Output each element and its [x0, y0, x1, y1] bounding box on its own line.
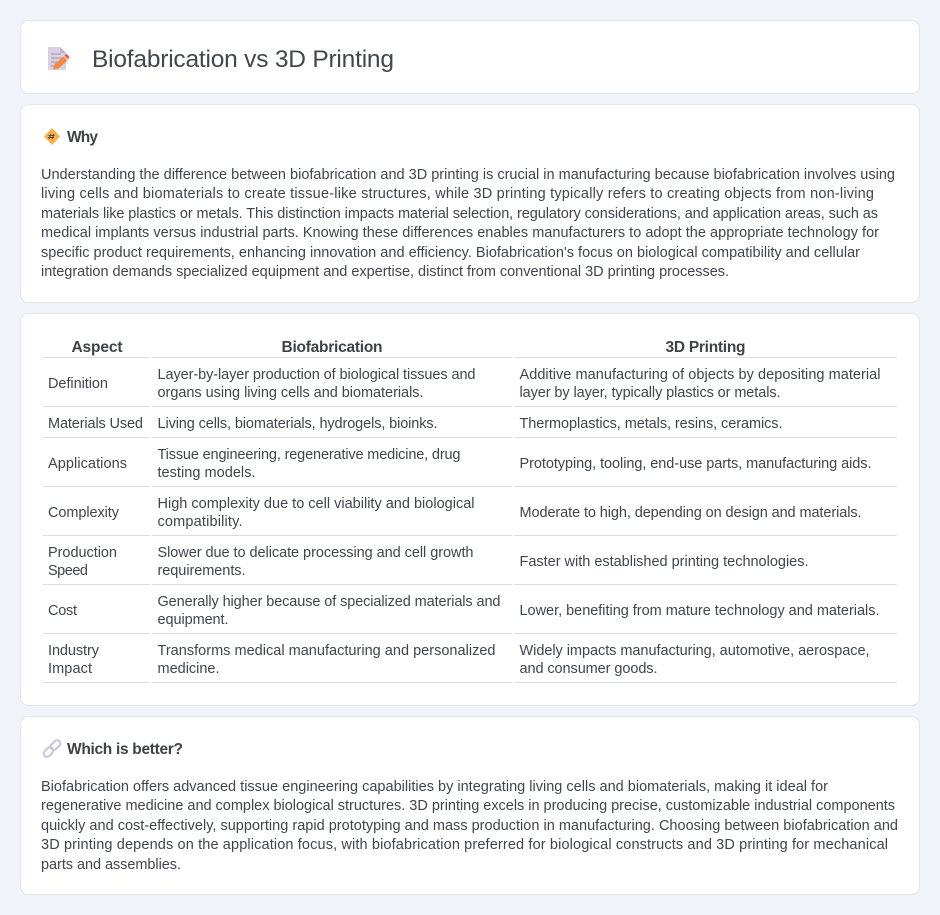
panel: header	[20, 20, 920, 94]
row: complexity: Complexity	[48, 505, 120, 521]
row: industry impact: Impact	[48, 661, 92, 677]
row: definition: layer by layer, typically plastics or metals.	[520, 385, 780, 401]
text block: why explanation	[41, 167, 895, 280]
row: definition: Definition	[48, 376, 108, 392]
text block: which is better explanation: Biofabrication offers advanced tissue engineering capabilities by integrating living cells and biomaterials, making it ideal for	[41, 779, 828, 795]
heading: why: Why	[67, 129, 98, 146]
text block: which is better explanation	[41, 779, 898, 873]
row: production speed: Production	[48, 545, 117, 561]
row: applications: Applications	[48, 456, 127, 472]
row: cost: Generally higher because of specialized materials and	[158, 594, 500, 610]
text block: why explanation: living cells and biomaterials to create tissue-like structures, while 3D printing typically refers to creating objects from non-living	[41, 186, 874, 202]
text block: which is better explanation: regenerative medicine and complex biological structures. 3D printing excels in producing precise, customizable industrial components	[41, 798, 895, 814]
icon: memo with pencil	[48, 47, 70, 70]
heading: which is better: Which is better?	[67, 741, 183, 758]
panel: comparison table	[20, 314, 920, 706]
row: complexity: High complexity due to cell viability and biological	[158, 496, 474, 512]
row: industry impact: medicine.	[158, 661, 220, 677]
row: production speed: Slower due to delicate processing and cell growth	[158, 545, 474, 561]
icon: link	[42, 739, 62, 758]
row: definition: Layer-by-layer production of biological tissues and	[158, 367, 476, 383]
row: definition: Additive manufacturing of objects by depositing material	[520, 367, 880, 383]
text block: why explanation: integration demands specialized equipment and expertise, distinct from conventional 3D printing processes.	[41, 264, 729, 280]
row: industry impact: and consumer goods.	[520, 661, 658, 677]
row: complexity: compatibility.	[158, 514, 242, 530]
row: definition: organs using living cells and biomaterials.	[158, 385, 424, 401]
row: cost: equipment.	[158, 612, 228, 628]
row: industry impact	[48, 643, 870, 677]
row: applications	[48, 447, 872, 481]
row: definition	[48, 367, 880, 401]
row: cost: Lower, benefiting from mature technology and materials.	[520, 603, 880, 619]
row: applications: Prototyping, tooling, end-use parts, manufacturing aids.	[520, 456, 872, 472]
table header row: Biofabrication	[282, 339, 382, 356]
row: industry impact: Widely impacts manufacturing, automotive, aerospace,	[520, 643, 870, 659]
table header row	[72, 339, 746, 356]
text block: which is better explanation: quickly and cost-effectively, supporting rapid prototyping and mass production in manufacturing. Choosing between biofabrication and	[41, 818, 898, 834]
row: materials used: Materials Used	[48, 416, 143, 432]
row: complexity: Moderate to high, depending on design and materials.	[520, 505, 862, 521]
row: production speed: requirements.	[158, 563, 246, 579]
text block: why explanation: Understanding the difference between biofabrication and 3D printing is crucial in manufacturing because biofabrication involves using	[41, 167, 895, 183]
panel: which is better	[20, 716, 920, 894]
text block: which is better explanation: parts and assemblies.	[41, 857, 181, 873]
row: production speed: Speed	[48, 563, 88, 579]
text block: why explanation: medical implants versus industrial parts. Knowing these differences enables manufacturers to adopt the appropriate technology for	[41, 225, 879, 241]
panel: why	[20, 104, 920, 302]
row: materials used	[48, 416, 782, 432]
text block: which is better explanation: 3D printing depends on the application focus, with biofabrication preferred for biological constructs and 3D printing for mechanical	[41, 837, 888, 853]
row: cost: Cost	[48, 603, 77, 619]
row: applications: Tissue engineering, regenerative medicine, drug	[158, 447, 460, 463]
row: materials used: Thermoplastics, metals, resins, ceramics.	[520, 416, 782, 432]
row: complexity	[48, 496, 862, 530]
table header row: Aspect	[72, 339, 122, 356]
title: Biofabrication vs 3D Printing	[92, 46, 394, 73]
text block: why explanation: specific product requirements, enhancing innovation and efficiency. Biofabrication's focus on biological compatibility and cellular	[41, 245, 860, 261]
row: industry impact: Industry	[48, 643, 100, 659]
row: production speed: Faster with established printing technologies.	[520, 554, 808, 570]
row: cost	[48, 594, 880, 628]
table header row: 3D Printing	[666, 339, 746, 356]
icon: diamond sign	[44, 128, 60, 145]
row: applications: testing models.	[158, 465, 256, 481]
text block: why explanation: materials like plastics or metals. This distinction impacts material selection, regulatory considerations, and application areas, such as	[41, 206, 878, 222]
row: materials used: Living cells, biomaterials, hydrogels, bioinks.	[158, 416, 438, 432]
row: production speed	[48, 545, 808, 579]
row: industry impact: Transforms medical manufacturing and personalized	[158, 643, 496, 659]
